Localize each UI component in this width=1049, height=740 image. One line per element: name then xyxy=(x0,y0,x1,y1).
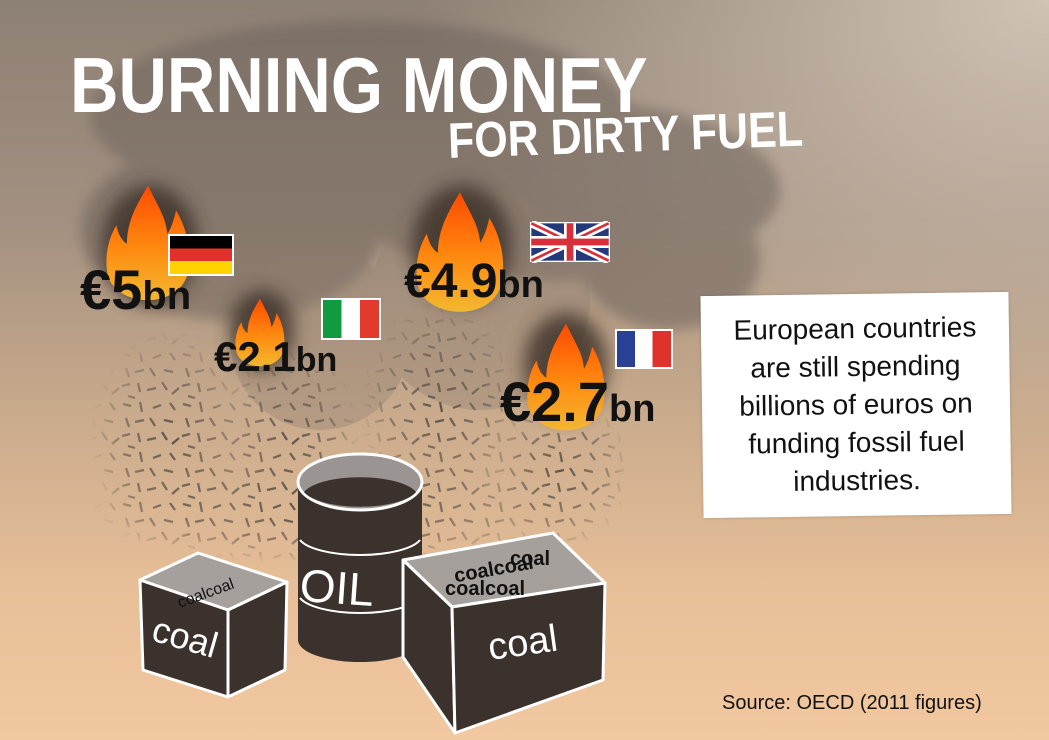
text box xyxy=(700,292,1012,518)
flag: France xyxy=(615,329,673,369)
fuel containers: coal xyxy=(485,618,560,669)
title: BURNING MONEY xyxy=(70,41,648,129)
coal box right xyxy=(403,533,605,733)
text box: are still spending xyxy=(750,350,961,383)
amount: France: €2.7bn xyxy=(500,370,655,433)
flag: Italy xyxy=(321,298,381,340)
background clouds xyxy=(76,0,1049,560)
coal box left xyxy=(140,553,287,697)
source: Source: OECD (2011 figures) xyxy=(722,692,982,714)
fuel containers: coalcoal xyxy=(175,576,236,612)
fuel containers: coal xyxy=(148,608,223,666)
flag: Germany xyxy=(168,234,234,276)
text box: industries. xyxy=(793,464,921,497)
amount: Germany: €5bn xyxy=(80,258,191,321)
text box: funding fossil fuel xyxy=(748,425,965,460)
flames with shadows xyxy=(102,185,608,417)
subtitle: FOR DIRTY FUEL xyxy=(447,101,804,169)
fuel containers: coalcoal xyxy=(452,552,535,587)
barrel: OIL xyxy=(298,559,376,616)
amount: Italy: €2.1bn xyxy=(214,333,337,380)
dust particles xyxy=(94,310,624,560)
barrel xyxy=(298,454,422,662)
flag: UK xyxy=(530,221,610,263)
fuel containers: coalcoal xyxy=(445,578,525,600)
text box: billions of euros on xyxy=(739,387,973,422)
fuel containers: coal xyxy=(510,548,550,570)
amount: UK: €4.9bn xyxy=(404,255,544,308)
text box: European countries xyxy=(733,311,977,346)
